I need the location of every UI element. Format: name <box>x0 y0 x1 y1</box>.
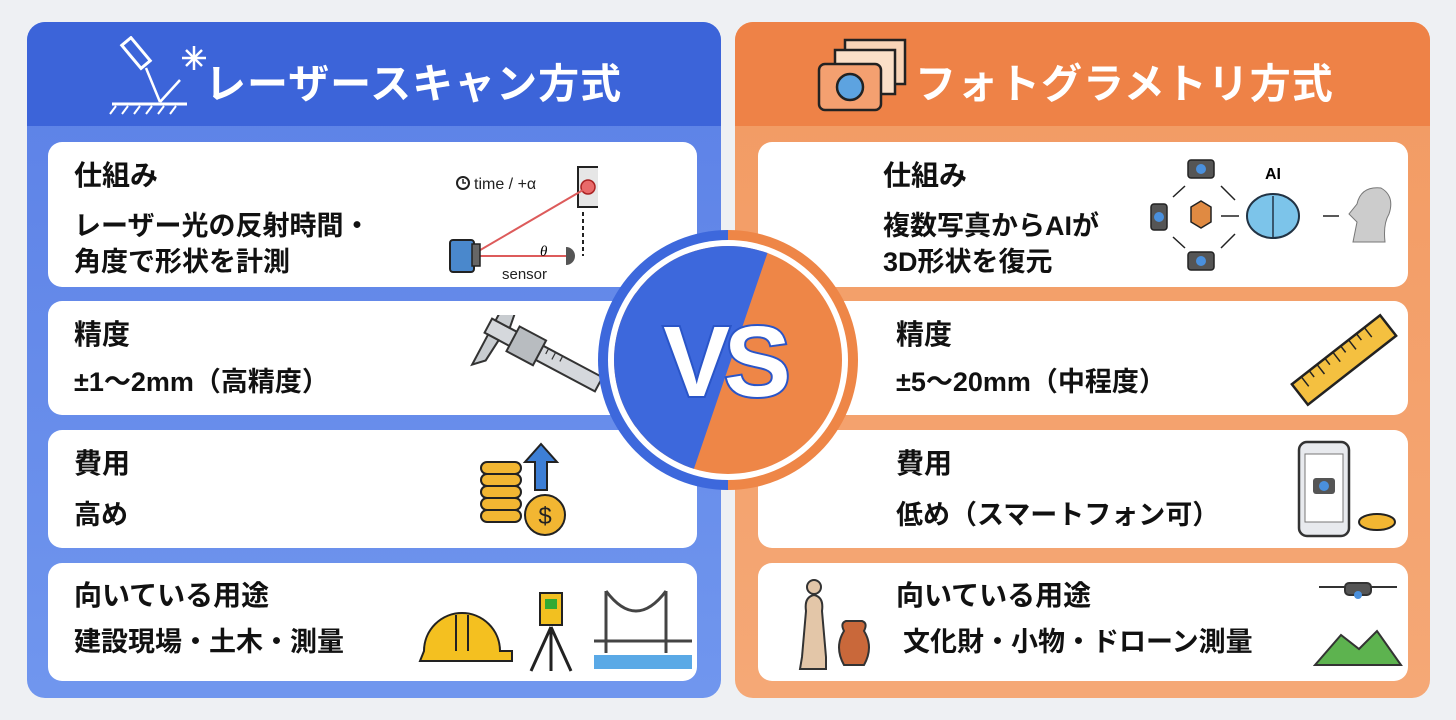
card: cost <box>758 430 1408 548</box>
icon: laser diagram <box>449 166 598 280</box>
title: laser scan: レーザースキャン方式 <box>205 61 622 107</box>
VS badge: VS <box>663 306 787 418</box>
card: mechanism: 仕組み <box>883 160 967 191</box>
text: 角度で形状を計測 <box>74 247 290 277</box>
text <box>74 211 370 277</box>
card: accuracy <box>758 301 1408 415</box>
icon: ruler <box>1290 314 1398 406</box>
header: laser scan <box>27 22 721 126</box>
title: photogrammetry: フォトグラメトリ方式 <box>915 61 1334 107</box>
card: accuracy: 精度 <box>896 319 952 350</box>
icon: cameras AI head <box>1150 159 1392 271</box>
card: mechanism: 3D形状を復元 <box>883 247 1053 277</box>
card: use: 向いている用途 <box>896 580 1091 611</box>
icon: cameras <box>818 38 906 112</box>
card: accuracy: ±5～20mm（中程度） <box>896 367 1166 397</box>
card: cost: 費用 <box>896 448 952 479</box>
card: mechanism: 複数写真からAIが <box>883 211 1099 241</box>
icon: caliper <box>470 315 600 393</box>
icon: laser diagram: θ <box>540 244 548 260</box>
icon: coins dollar <box>480 442 566 536</box>
icon: drone hills <box>1313 582 1403 666</box>
heading: 仕組み <box>74 160 158 191</box>
icon: cameras AI head: AI <box>1265 166 1281 183</box>
card: use: 文化財・小物・ドローン測量 <box>903 627 1253 657</box>
icon: laser <box>109 36 206 115</box>
card: cost: 高め <box>74 500 128 530</box>
header: photogrammetry <box>735 22 1430 126</box>
VS badge <box>598 230 858 490</box>
icon: laser diagram: time / +α <box>474 176 536 193</box>
panel: laser scan <box>27 22 721 698</box>
card: cost: 費用 <box>74 448 130 479</box>
card: accuracy: ±1～2mm（高精度） <box>74 367 329 397</box>
card: use: 向いている用途 <box>74 580 269 611</box>
card: use <box>48 563 697 681</box>
card: cost <box>48 430 697 548</box>
icon: helmet tripod bridge <box>418 590 692 672</box>
card: use: 建設現場・土木・測量 <box>74 627 344 657</box>
panel: photogrammetry <box>735 22 1430 698</box>
icon: smartphone coin <box>1298 440 1396 538</box>
card: accuracy <box>48 301 697 415</box>
card: mechanism <box>758 142 1408 287</box>
text: レーザー光の反射時間・ <box>74 211 370 241</box>
card: cost: 低め（スマートフォン可） <box>896 500 1219 530</box>
icon: coins dollar: $ <box>538 503 552 530</box>
card: mechanism <box>48 142 697 287</box>
card: accuracy: 精度 <box>74 319 130 350</box>
icon: statue vase <box>798 579 870 670</box>
card: use <box>758 563 1408 681</box>
